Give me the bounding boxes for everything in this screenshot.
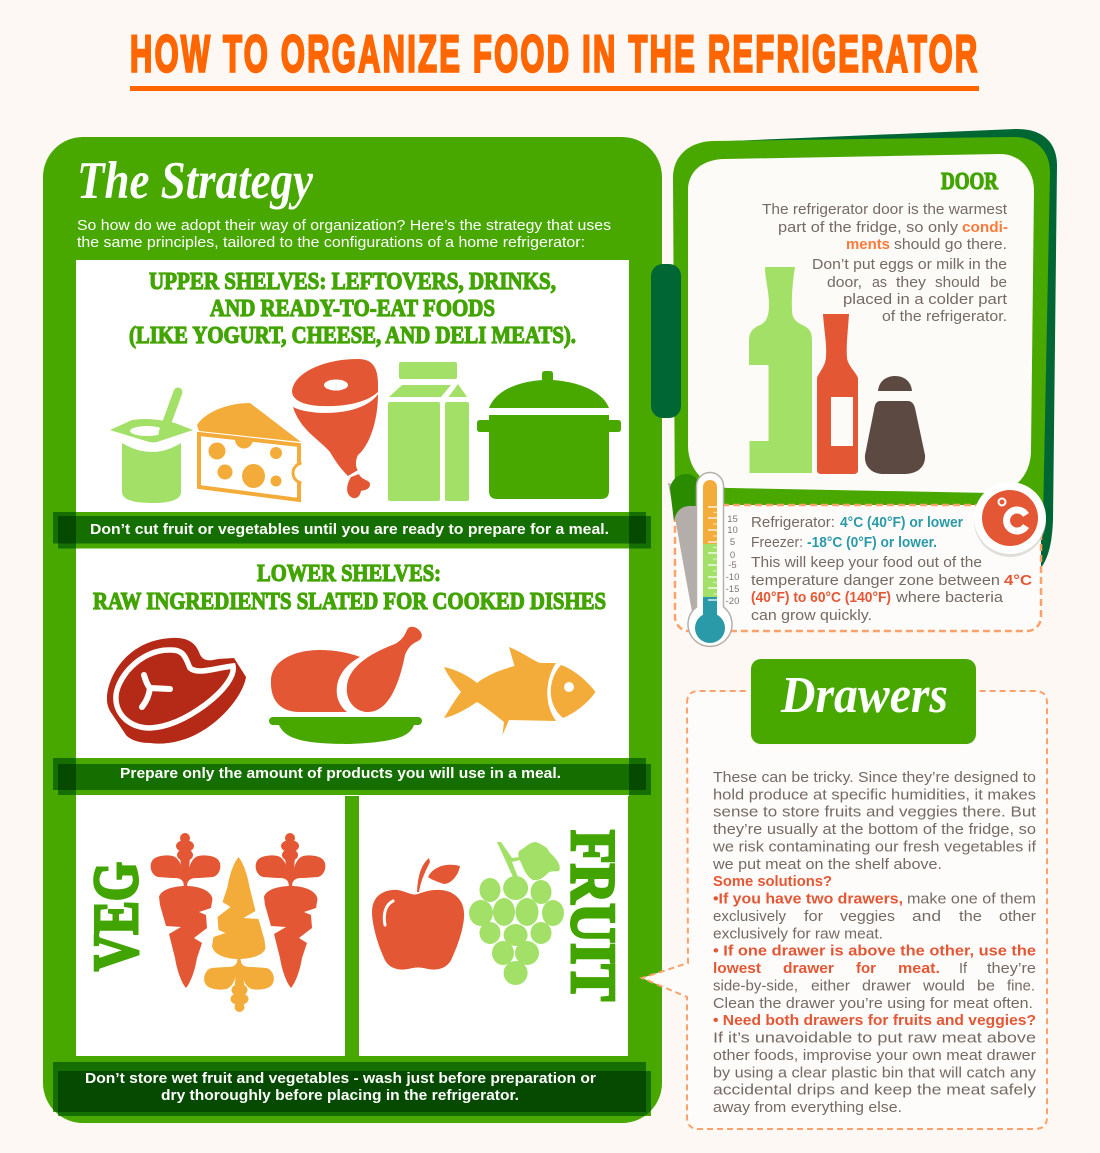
drawers text: we risk contaminating our fresh vegetables if: [712, 840, 1037, 856]
heading: lower shelves: RAW INGREDIENTS SLATED FOR COOKED DISHES: [93, 588, 606, 615]
thermometer scale: -5: [728, 560, 737, 571]
drawers text: Clean the drawer you’re using for meat often.: [713, 996, 1033, 1012]
drawers text: make one of them: [907, 892, 1036, 908]
icon: pot: [477, 371, 621, 499]
drawers text: away from everything else.: [713, 1100, 902, 1116]
drawers text: by using a clear plastic bin that will catch any: [713, 1065, 1037, 1081]
temperature text: temperature danger zone between: [751, 573, 1000, 589]
drawers text: [712, 770, 1037, 1116]
icon: green bottle: [749, 267, 812, 473]
icon: cheese: [197, 403, 316, 500]
label: veg: VEG: [80, 862, 151, 971]
banner: wet fruit: Don’t store wet fruit and vegetables - wash just before preparation or: [85, 1071, 596, 1087]
thermometer scale: -15: [726, 584, 739, 595]
temperature text: can grow quickly.: [751, 608, 872, 624]
heading: upper shelves: AND READY-TO-EAT FOODS: [210, 295, 495, 322]
icon: ham: [292, 359, 378, 498]
drawers text: •If you have two drawers,: [713, 892, 903, 908]
intro text: the same principles, tailored to the configurations of a home refrigerator:: [77, 235, 585, 251]
thermometer scale: -10: [726, 572, 739, 583]
heading: lower shelves: [93, 560, 606, 615]
door text: should: [935, 275, 980, 291]
thermometer scale: -20: [726, 596, 739, 607]
icon: celsius badge: [974, 482, 1046, 557]
door text: be: [990, 275, 1007, 291]
drawers text: other: [999, 909, 1036, 925]
door text: ments: [846, 237, 890, 253]
heading: upper shelves: (LIKE YOGURT, CHEESE, AND DELI MEATS).: [129, 322, 576, 349]
door text: door,: [827, 275, 862, 291]
icon: grapes: [469, 842, 564, 985]
door text: placed in a colder part: [843, 292, 1007, 308]
title: HOW TO ORGANIZE FOOD IN THE REFRIGERATOR: [130, 25, 977, 82]
heading: upper shelves: [129, 268, 576, 349]
drawers text: • Need both drawers for fruits and veggies?: [713, 1013, 1036, 1029]
drawers text: be: [977, 978, 995, 994]
heading: drawers: [751, 659, 976, 744]
drawers text: sense to store fruits and veggies there. But: [713, 805, 1036, 821]
door text: they: [896, 275, 927, 291]
drawers text: If it’s unavoidable to put raw meat above: [713, 1031, 1036, 1047]
drawers text: they’re: [987, 961, 1036, 977]
banner: prepare only: Prepare only the amount of products you will use in a meal.: [120, 766, 561, 782]
drawers text: either: [811, 978, 850, 994]
drawers text: Some solutions?: [713, 874, 832, 890]
drawers text: they’re usually at the bottom of the fridge, so: [713, 822, 1036, 838]
drawers text: side-by-side,: [713, 978, 798, 994]
heading: upper shelves: UPPER SHELVES: LEFTOVERS, DRINKS,: [149, 268, 556, 295]
intro text: So how do we adopt their way of organization? Here’s the strategy that uses: [77, 218, 611, 234]
drawers text: If: [959, 961, 968, 977]
banner: don't cut: Don’t cut fruit or vegetables until you are ready to prepare for a meal.: [90, 522, 609, 538]
door text: [762, 202, 1008, 325]
thermometer scale: 15: [727, 514, 738, 525]
drawers text: for: [856, 961, 876, 977]
heading: the strategy: The Strategy: [77, 152, 313, 210]
drawers text: we put meat on the shelf above.: [712, 857, 942, 873]
heading: door: DOOR: [941, 168, 998, 195]
door text: The refrigerator door is the warmest: [762, 202, 1007, 218]
door text: should go there.: [894, 237, 1007, 253]
intro text: [77, 218, 611, 251]
icon: yogurt: [110, 392, 193, 503]
icon: steak: [107, 638, 246, 744]
thermometer scale: 10: [727, 525, 738, 536]
drawers text: for: [804, 909, 823, 925]
handle: [651, 264, 681, 418]
thermometer shadow: [668, 474, 698, 612]
icon: shaker: [865, 376, 925, 474]
drawers text: accidental drips and keep the meat safely: [713, 1083, 1037, 1099]
heading: drawers: Drawers: [780, 667, 948, 724]
drawers text: the: [959, 909, 982, 925]
door text: part of the fridge, so only: [778, 220, 959, 236]
banner: wet fruit: [53, 1062, 651, 1116]
drawers text: drawer: [862, 978, 911, 994]
temperature text: (40°F) to 60°C (140°F): [751, 590, 891, 606]
drawers text: • If one drawer is above the other, use the: [713, 944, 1036, 960]
door text: Don’t put eggs or milk in the: [812, 257, 1007, 273]
drawers text: hold produce at specific humidities, it makes: [713, 787, 1036, 803]
thermometer scale: 0: [730, 550, 735, 561]
icon: red bottle: [817, 314, 858, 474]
temperature text: 4°C (40°F) or lower: [840, 515, 963, 531]
thermometer scale: 5: [730, 537, 735, 548]
heading: lower shelves: LOWER SHELVES:: [257, 560, 441, 587]
icon: apple: [372, 858, 464, 970]
temperature text: Freezer:: [751, 535, 803, 551]
banner: don't cut: [53, 512, 651, 548]
thermometer scale: [726, 514, 739, 607]
panel: door: [673, 129, 1057, 568]
panel: temperature: [675, 505, 1041, 631]
panel: the strategy: [43, 137, 662, 1123]
white shelf area: [76, 260, 629, 1056]
door text: condi-: [962, 220, 1008, 236]
drawers text: meat.: [898, 961, 940, 977]
drawers text: other foods, improvise your own meat drawer: [713, 1048, 1036, 1064]
drawers text: veggies: [840, 909, 895, 925]
banner: wet fruit: dry thoroughly before placing in the refrigerator.: [161, 1088, 519, 1104]
drawers text: drawer: [783, 961, 834, 977]
drawers text: exclusively: [713, 909, 787, 925]
drawers text: lowest: [713, 961, 761, 977]
drawers text: and: [912, 909, 941, 925]
temperature text: where bacteria: [895, 590, 1004, 606]
drawers text: would: [922, 978, 965, 994]
icon: carrots: [151, 833, 325, 1012]
temperature text: -18°C (0°F) or lower.: [807, 535, 937, 551]
drawers text: These can be tricky. Since they’re designed to: [713, 770, 1036, 786]
icon: roast chicken: [269, 627, 422, 744]
temperature text: Refrigerator:: [751, 515, 835, 531]
temperature text: 4°C: [1004, 573, 1033, 589]
temperature text: [751, 515, 1033, 624]
drawers text: fine.: [1007, 978, 1035, 994]
thermometer: [688, 472, 739, 646]
drawers text: exclusively for raw meat.: [713, 926, 883, 942]
banner: prepare only: [53, 758, 651, 795]
icon: fish: [444, 647, 596, 735]
icon: milk carton: [388, 362, 469, 501]
door text: of the refrigerator.: [882, 309, 1007, 325]
door text: as: [872, 275, 887, 291]
panel: drawers: [642, 659, 1047, 1129]
temperature text: This will keep your food out of the: [751, 555, 982, 571]
label: fruit: FRUIT: [558, 830, 629, 1001]
